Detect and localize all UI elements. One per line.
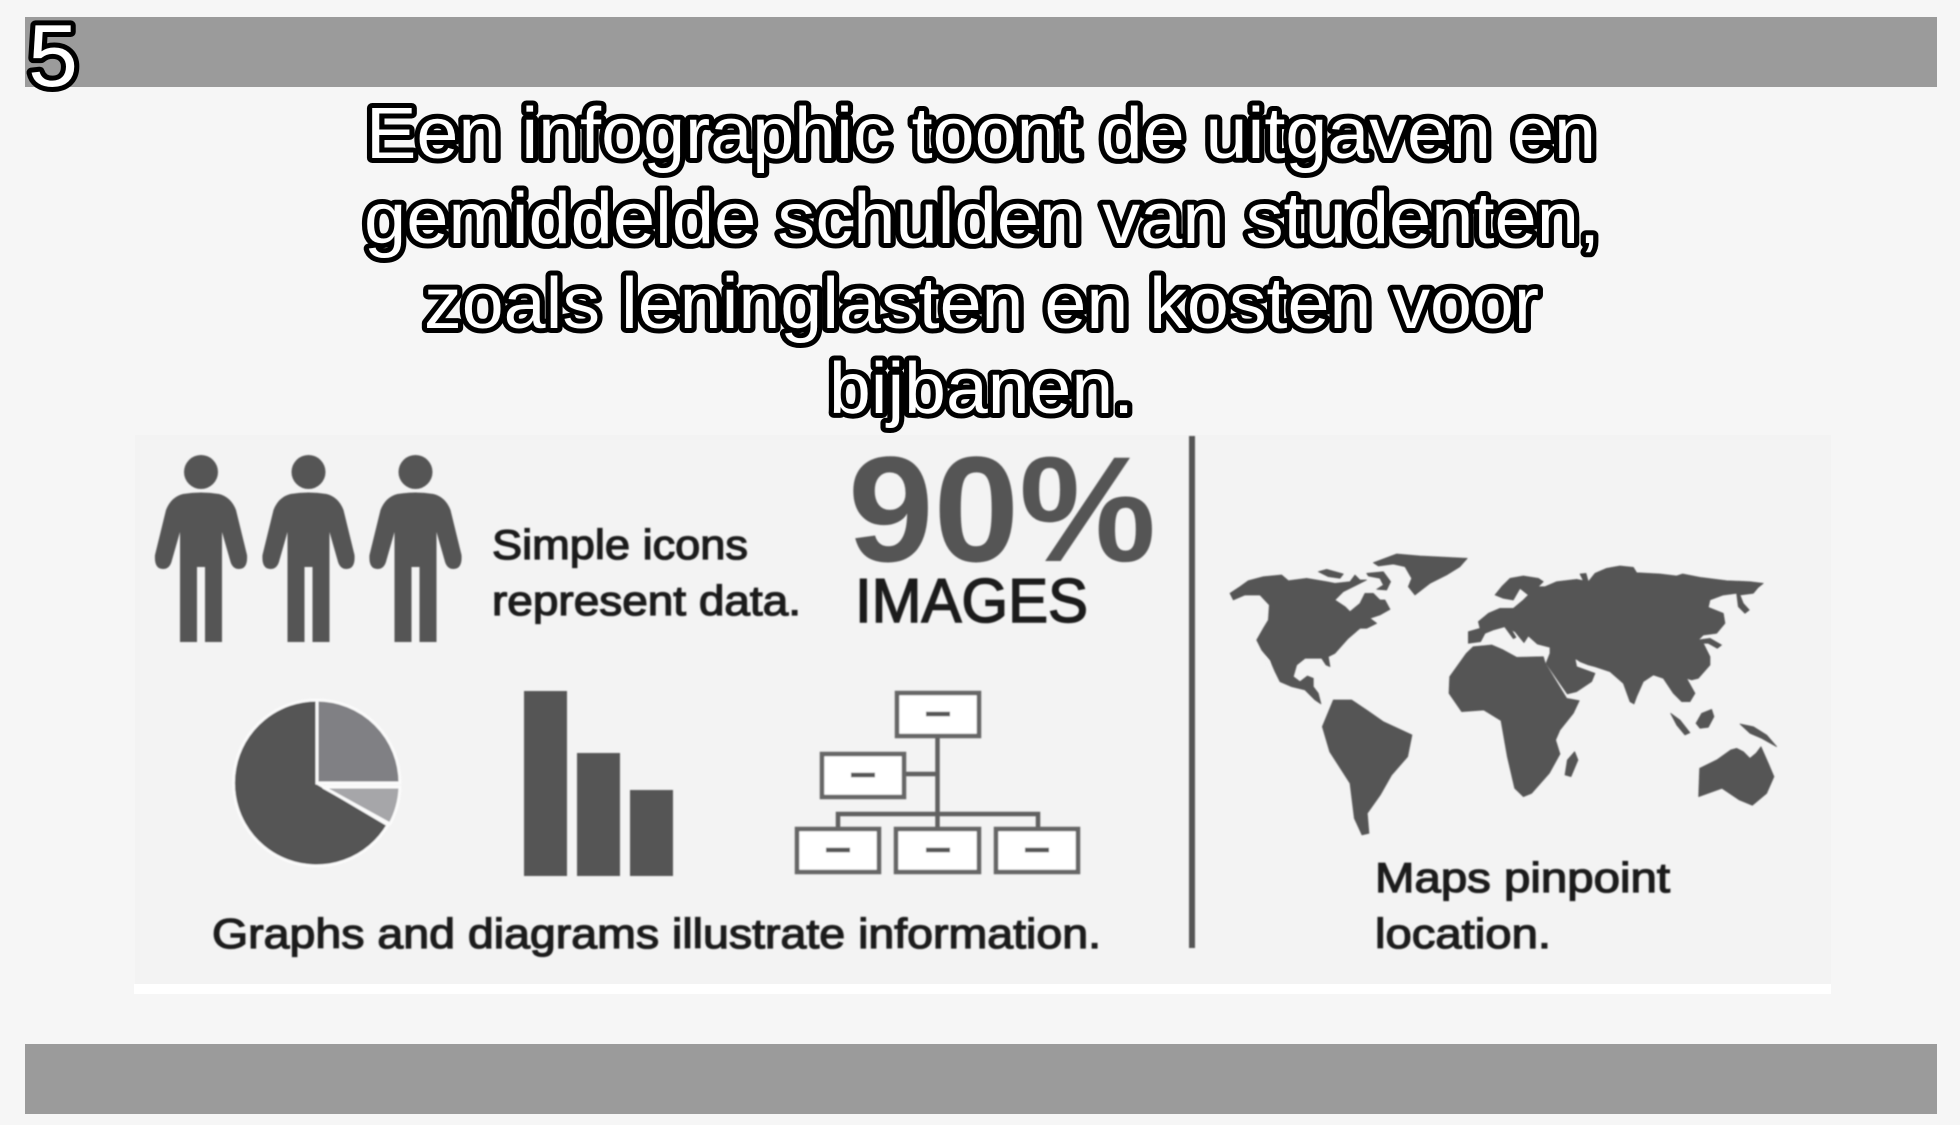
chart: bars xyxy=(524,691,673,876)
caption: maps xyxy=(1375,854,1670,957)
title: bijbanen. xyxy=(829,349,1134,429)
caption: maps: Maps pinpoint xyxy=(1375,854,1670,901)
south america xyxy=(1322,700,1412,835)
madagascar xyxy=(1565,752,1578,777)
icon: three people xyxy=(155,455,462,642)
italy xyxy=(1505,627,1516,639)
title: gemiddelde schulden van studenten, xyxy=(364,179,1600,259)
australia xyxy=(1699,747,1774,805)
bar 1 xyxy=(524,691,567,876)
map east: eurasia africa australia xyxy=(1449,566,1777,805)
north america xyxy=(1230,575,1390,704)
top grey band xyxy=(25,17,1937,87)
arctic island xyxy=(1318,569,1343,578)
map west: americas xyxy=(1230,554,1467,835)
bar 2 xyxy=(577,753,620,876)
org box bottom 3 xyxy=(996,829,1078,872)
label: images: IMAGES xyxy=(855,567,1088,636)
org box left xyxy=(822,754,904,797)
baffin island xyxy=(1367,572,1391,590)
africa xyxy=(1449,645,1579,797)
title: zoals leninglasten en kosten voor xyxy=(424,264,1539,344)
panel background xyxy=(135,435,1831,984)
title xyxy=(364,94,1600,429)
eurasia xyxy=(1468,566,1763,704)
new guinea xyxy=(1740,724,1777,747)
vertical divider xyxy=(1189,436,1195,948)
panel white lower edge xyxy=(134,984,1831,994)
borneo xyxy=(1696,709,1714,728)
diagram: org chart xyxy=(797,693,1078,872)
greenland xyxy=(1373,554,1467,595)
bottom grey band xyxy=(25,1044,1937,1114)
world map xyxy=(1230,554,1777,835)
connector lines xyxy=(838,736,1038,828)
org box bottom 2 xyxy=(896,829,979,872)
pie medium slice xyxy=(317,700,400,783)
text: simple icons: Simple icons xyxy=(492,521,748,568)
slide number: 5 xyxy=(28,6,78,105)
org box top xyxy=(897,693,979,736)
icon: person 1 xyxy=(155,455,247,642)
pie dark slice xyxy=(233,700,388,866)
text: simple icons xyxy=(492,521,801,624)
stat: 90%: 90% xyxy=(848,425,1156,593)
baja slit xyxy=(1265,656,1270,667)
pie light slice xyxy=(323,787,400,824)
icon: person 3 xyxy=(369,455,462,642)
panel contents xyxy=(155,425,1777,957)
org box bottom 1 xyxy=(797,829,879,872)
icon: person 2 xyxy=(262,455,355,642)
text: simple icons: represent data. xyxy=(492,577,801,624)
title: Een infographic toont de uitgaven en xyxy=(366,94,1596,174)
caption: graphs and diagrams: Graphs and diagrams illustrate information. xyxy=(212,910,1101,957)
chart: pie xyxy=(233,700,400,866)
bar 3 xyxy=(630,790,673,876)
panel: infographic sample xyxy=(134,425,1831,994)
caption: maps: location. xyxy=(1375,910,1551,957)
sumatra xyxy=(1671,713,1690,735)
